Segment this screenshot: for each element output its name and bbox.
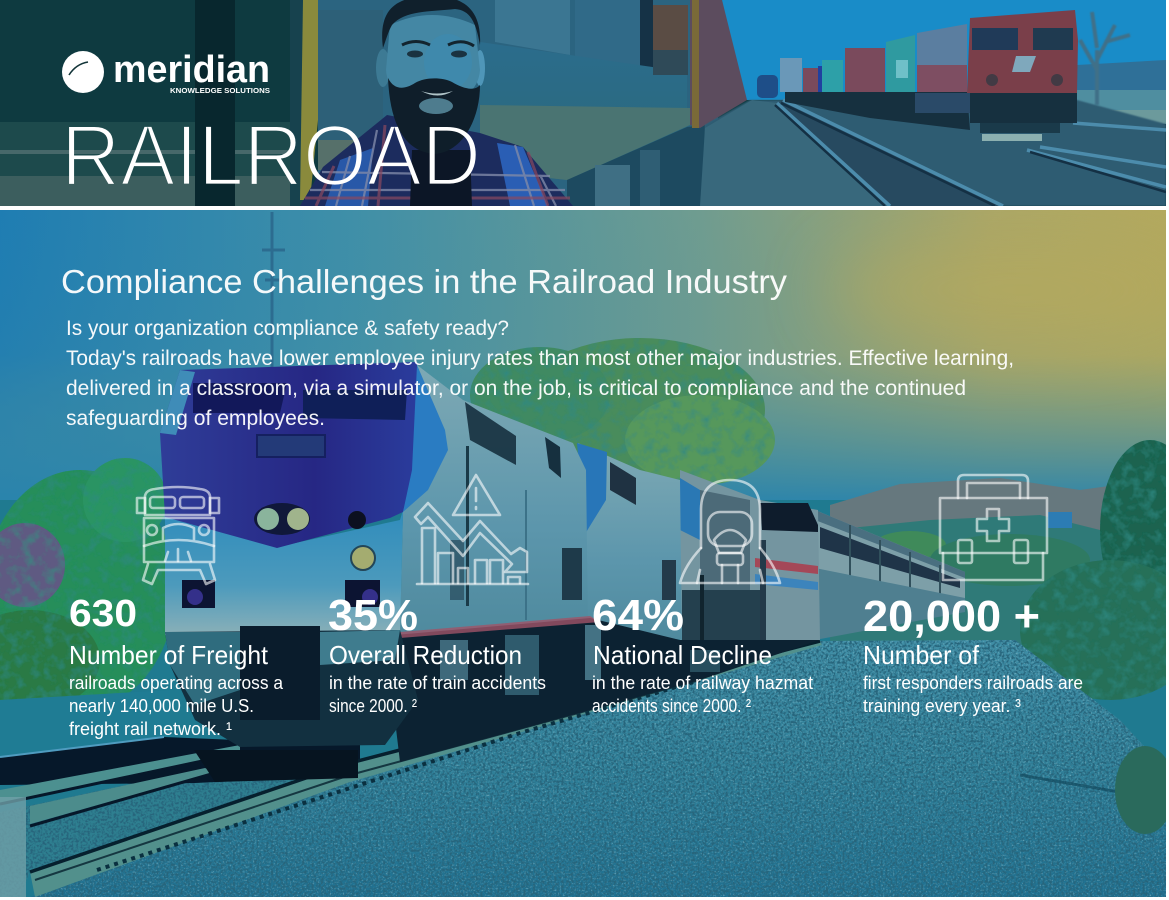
intro paragraph: Is your organization compliance & safety ready? — [66, 317, 509, 340]
coaches — [815, 510, 965, 640]
ears — [376, 49, 388, 87]
gravel — [0, 640, 1169, 897]
hair — [382, 0, 480, 48]
stat: 64% national decline: in the rate of railway hazmat — [592, 672, 813, 693]
stat: 64% national decline — [592, 591, 813, 716]
stat: 20,000+ first responders — [863, 592, 1083, 716]
distant landscape — [1077, 60, 1166, 90]
rails — [0, 641, 822, 897]
stat: 630 freight railroads: railroads operating across a — [69, 672, 284, 693]
beard — [388, 78, 480, 154]
stat: 35% overall reduction: Overall Reduction — [329, 640, 522, 670]
stat: 35% overall reduction: 35% — [328, 591, 418, 640]
heading: compliance challenges: Compliance Challenges in the Railroad Industry — [61, 263, 788, 300]
second locomotive — [577, 443, 682, 640]
plaid shirt — [300, 115, 573, 206]
stat: 64% national decline: 64% — [592, 591, 684, 640]
stat: 630 freight railroads: nearly 140,000 mile U.S. — [69, 695, 254, 716]
lead locomotive side — [400, 365, 588, 635]
logo: meridian knowledge solutions — [62, 49, 270, 95]
stat: 630 freight railroads: freight rail network. ¹ — [69, 718, 232, 739]
ground and tracks — [705, 100, 1166, 206]
freight train far right — [757, 10, 1078, 141]
logo: meridian knowledge solutions: KNOWLEDGE SOLUTIONS — [170, 88, 270, 95]
intro paragraph: safeguarding of employees. — [66, 407, 325, 430]
logo: meridian knowledge solutions: meridian — [113, 49, 270, 91]
header photo: railway worker beside freight train — [0, 0, 1166, 206]
face — [386, 15, 480, 89]
stat: 20,000+ first responders: 20,000 + — [863, 592, 1040, 641]
stat: 630 freight railroads: Number of Freight — [69, 640, 269, 670]
intro paragraph: delivered in a classroom, via a simulator, or on the job, is critical to compliance and the continued — [66, 377, 966, 400]
background hills and trees — [0, 338, 1169, 710]
undercarriage — [395, 616, 820, 762]
third unit — [680, 470, 820, 640]
worker — [300, 0, 573, 206]
stat: 35% overall reduction — [328, 591, 546, 716]
left flat ground — [0, 692, 130, 710]
main photo: passenger train on gravel track — [0, 210, 1169, 897]
stat: 64% national decline: National Decline — [593, 640, 772, 670]
stat: 64% national decline: accidents since 2000. ² — [592, 695, 751, 716]
stat: 630 freight railroads: 630 — [69, 593, 137, 635]
icon: hazmat suit worker — [680, 480, 780, 583]
stat: 20,000+ first responders: Number of — [863, 640, 980, 670]
icon: declining chart with warning — [415, 475, 528, 584]
stat: 20,000+ first responders: first responders railroads are — [863, 672, 1083, 693]
stat: 20,000+ first responders: training every year. ³ — [863, 695, 1021, 716]
intro paragraph: Today's railroads have lower employee injury rates than most other major industries. Effective learning, — [66, 347, 1014, 370]
icon: first aid kit — [940, 475, 1047, 580]
freight wagon wall — [318, 0, 718, 206]
title: RAILROAD: RAILROAD — [61, 108, 481, 204]
stat: 630 freight railroads — [69, 593, 284, 739]
stat: 35% overall reduction: in the rate of train accidents — [329, 672, 546, 693]
icon: locomotive — [137, 487, 219, 584]
stat: 35% overall reduction: since 2000. ² — [329, 695, 417, 716]
intro paragraph — [66, 317, 1014, 430]
lead locomotive front — [160, 362, 448, 782]
